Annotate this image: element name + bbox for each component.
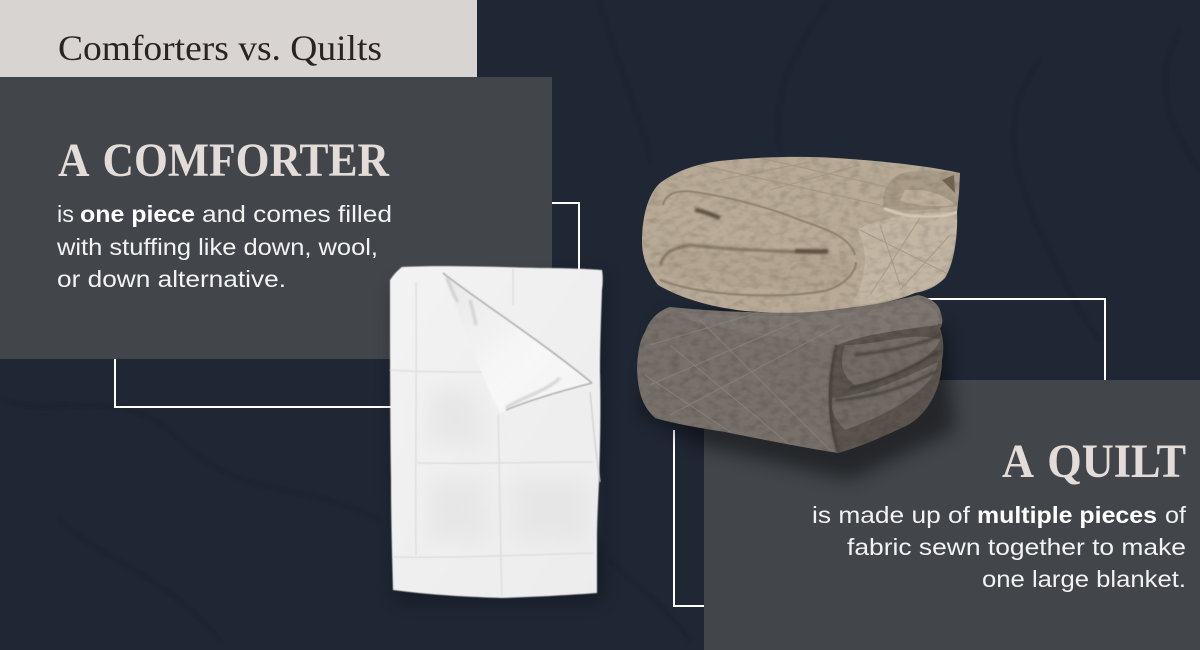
icon: white comforter — [390, 266, 604, 600]
text block: quilt description: one large blanket. — [982, 566, 1186, 592]
text block: quilt description: is made up of — [812, 502, 971, 528]
connector line: comforter panel to blanket (bottom) — [115, 359, 392, 407]
text block: quilt description: multiple pieces — [977, 502, 1157, 528]
panel: a comforter — [0, 77, 552, 359]
comforter quilted seams — [390, 268, 600, 597]
gray folded quilt — [637, 295, 944, 453]
title banner — [0, 0, 477, 77]
text block: comforter description: with stuffing like down, wool, — [56, 234, 378, 260]
text block: comforter description: or down alternative. — [57, 266, 286, 292]
heading: a comforter: A COMFORTER — [58, 134, 390, 187]
text block: quilt description — [812, 502, 1187, 592]
heading: a quilt: A QUILT — [1002, 435, 1186, 488]
connector line: quilt panel to folded quilts (left) — [674, 430, 705, 606]
connector line: quilt panel to folded quilts (right) — [925, 299, 1105, 381]
text block: comforter description: and comes filled — [202, 201, 392, 227]
title: Comforters vs. Quilts — [58, 28, 382, 68]
text block: comforter description: is — [57, 201, 74, 227]
text block: comforter description: one piece — [80, 201, 195, 227]
folded corner flap — [443, 273, 592, 413]
text block: comforter description — [56, 201, 392, 292]
icon: folded quilts stack — [630, 150, 970, 480]
text block: quilt description: of — [1165, 502, 1187, 528]
comforter shading — [430, 390, 585, 540]
text block: quilt description: fabric sewn together to make — [847, 534, 1186, 560]
panel: a quilt — [704, 380, 1200, 650]
tan folded quilt — [642, 156, 960, 313]
connector line: comforter panel to blanket (top) — [552, 203, 579, 272]
